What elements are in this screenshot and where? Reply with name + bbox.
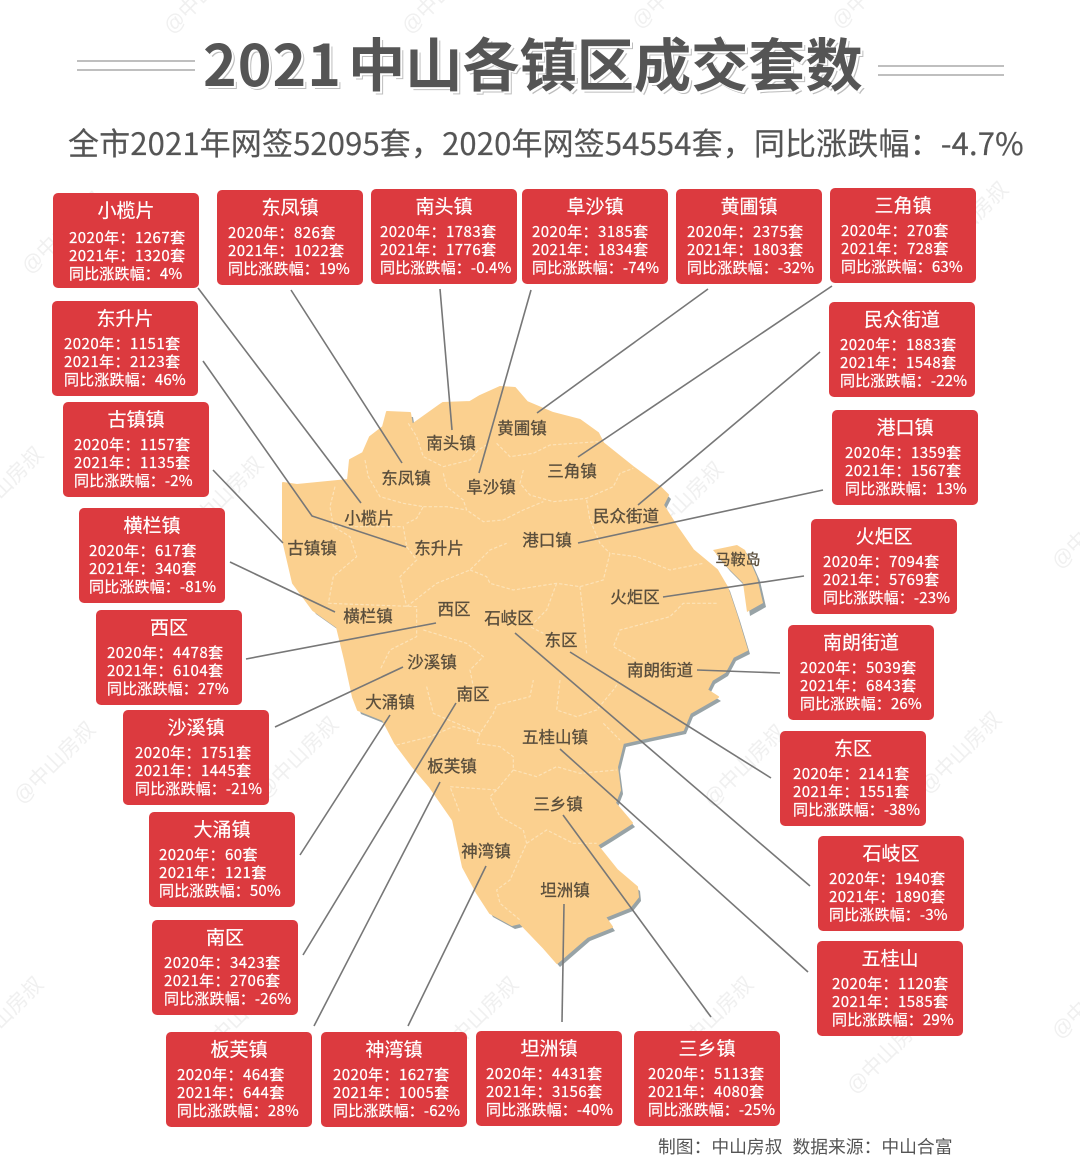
panel: 神湾镇: 同比涨跌幅：-62% [333,1100,460,1121]
panel: 东区 [780,731,926,826]
panel: 石岐区 [818,836,964,931]
panel: 古镇镇 [63,402,209,497]
text: @中山房叔 [177,453,268,544]
panel: 板芙镇: 2021年：644套 [177,1082,285,1103]
panel: 板芙镇: 2020年：464套 [177,1064,285,1085]
panel: 南朗街道: 2021年：6843套 [800,675,917,696]
subtitle: 全市2021年网签52095套，2020年网签54554套，同比涨跌幅：-4.7% [68,119,1024,164]
map place labels: 东升片 [414,535,464,559]
panel: 大涌镇: 大涌镇 [193,815,250,842]
panel: 板芙镇 [166,1032,312,1127]
map place labels: 阜沙镇 [466,474,516,498]
panel: 西区: 西区 [150,613,188,640]
panel: 沙溪镇: 沙溪镇 [167,713,224,740]
panel: 东升片: 2021年：2123套 [64,351,181,372]
map place labels: 西区 [438,596,470,620]
map place labels: 三乡镇 [533,791,583,815]
panel: 三角镇: 2021年：728套 [841,238,949,259]
panel: 民众街道: 同比涨跌幅：-22% [840,370,967,391]
panel: 南头镇: 2020年：1783套 [380,221,497,242]
panel: 横栏镇: 2020年：617套 [89,540,197,561]
panel: 沙溪镇: 2020年：1751套 [135,742,252,763]
panel: 民众街道: 民众街道 [864,305,940,332]
panel: 五桂山: 2020年：1120套 [832,973,949,994]
panel: 坦洲镇: 2020年：4431套 [486,1063,603,1084]
panel: 三乡镇: 2020年：5113套 [648,1063,765,1084]
map place labels: 神湾镇 [461,838,511,862]
panel: 港口镇 [832,410,978,505]
panel: 南区: 南区 [206,923,244,950]
map place labels: 石岐区 [484,605,534,629]
panel: 东升片: 2020年：1151套 [64,333,181,354]
panel: 古镇镇: 同比涨跌幅：-2% [74,470,193,491]
panel: 石岐区: 2020年：1940套 [829,868,946,889]
panel: 神湾镇: 2021年：1005套 [333,1082,450,1103]
panel: 火炬区: 2021年：5769套 [823,569,940,590]
map place labels [287,415,761,901]
text: @中山房叔 [637,458,728,549]
map place labels: 小榄片 [344,505,394,529]
panel: 大涌镇: 同比涨跌幅：50% [159,880,281,901]
panel: 民众街道 [829,302,975,397]
panel: 小榄片: 2021年：1320套 [69,245,186,266]
panel: 五桂山: 2021年：1585套 [832,991,949,1012]
panel: 黄圃镇: 黄圃镇 [720,192,778,219]
text: @中山房叔 [192,973,283,1064]
panel: 三角镇: 三角镇 [874,191,932,218]
panel: 小榄片 [53,193,199,288]
map place labels: 民众街道 [593,503,659,527]
map place labels: 三角镇 [547,458,597,482]
text: @中山房叔 [922,178,1013,269]
panel: 阜沙镇: 阜沙镇 [566,192,624,219]
panel: 黄圃镇: 2020年：2375套 [687,221,804,242]
panel: 南朗街道: 2020年：5039套 [800,657,917,678]
panel: 大涌镇: 2021年：121套 [159,862,267,883]
panel: 西区 [96,610,242,705]
panel: 古镇镇: 2020年：1157套 [74,434,191,455]
panel: 三角镇 [830,188,976,283]
panel: 横栏镇: 横栏镇 [123,511,180,538]
panel: 东区: 2020年：2141套 [793,763,910,784]
map place labels: 坦洲镇 [540,877,590,901]
title: 2021中山各镇区成交套数 [203,21,863,103]
text: @中山房叔 [432,973,523,1064]
panel: 板芙镇: 同比涨跌幅：28% [177,1100,299,1121]
map place labels: 大涌镇 [365,689,415,713]
panel: 黄圃镇 [676,189,822,284]
text: @中山房叔 [252,713,343,804]
map place labels: 东区 [544,627,578,651]
panel: 古镇镇: 2021年：1135套 [74,452,191,473]
panel: 南朗街道: 南朗街道 [823,628,899,655]
map place labels: 马鞍岛 [715,548,761,570]
text: @中山房叔 [9,718,100,809]
panel: 神湾镇 [321,1032,467,1127]
panel: 港口镇: 2020年：1359套 [845,442,962,463]
text: @中山房叔 [699,721,790,812]
panel: 三乡镇 [634,1031,780,1126]
panel: 火炬区: 2020年：7094套 [823,551,940,572]
panel: 沙溪镇: 2021年：1445套 [135,760,252,781]
map place labels: 东凤镇 [381,465,431,489]
text: @中山房叔 [915,708,1006,799]
panel: 古镇镇: 古镇镇 [107,405,164,432]
source credit: 制图：中山房叔 数据来源：中山合富 [658,1133,952,1159]
panel: 南头镇: 南头镇 [415,192,472,219]
text: @中山房叔 [842,1008,933,1099]
map place labels: 五桂山镇 [522,724,588,748]
panel: 港口镇: 港口镇 [876,413,934,440]
panel: 横栏镇 [79,508,225,603]
panel: 民众街道: 2020年：1883套 [840,334,957,355]
panel: 坦洲镇: 2021年：3156套 [486,1081,603,1102]
panel: 坦洲镇: 同比涨跌幅：-40% [486,1099,613,1120]
panel: 南头镇: 2021年：1776套 [380,239,497,260]
panel: 东凤镇: 东凤镇 [261,193,318,220]
panel: 南区: 同比涨跌幅：-26% [164,988,291,1009]
panel: 东区: 同比涨跌幅：-38% [793,799,920,820]
panel: 南朗街道 [788,625,934,720]
panel: 板芙镇: 板芙镇 [210,1035,268,1062]
panel: 西区: 同比涨跌幅：27% [107,678,229,699]
panel: 港口镇: 2021年：1567套 [845,460,962,481]
panel: 小榄片: 同比涨跌幅：4% [69,263,182,284]
panel: 南头镇: 同比涨跌幅：-0.4% [380,257,512,278]
panel: 沙溪镇 [123,710,269,805]
map of Zhongshan [283,387,766,967]
panel: 黄圃镇: 2021年：1803套 [687,239,804,260]
panel: 东凤镇: 2021年：1022套 [228,240,345,261]
panel: 火炬区: 同比涨跌幅：-23% [823,587,950,608]
panel: 大涌镇 [149,812,295,907]
panel: 三角镇: 同比涨跌幅：63% [841,256,963,277]
map place labels: 南朗街道 [627,657,693,681]
map place labels: 南区 [456,681,490,705]
panel: 三乡镇: 2021年：4080套 [648,1081,765,1102]
panel: 东区: 东区 [834,734,872,761]
map place labels: 横栏镇 [343,603,393,627]
panel: 三乡镇: 三乡镇 [678,1034,736,1061]
panel: 港口镇: 同比涨跌幅：13% [845,478,967,499]
map place labels: 南头镇 [426,430,476,454]
panel: 神湾镇: 神湾镇 [365,1035,422,1062]
map place labels: 火炬区 [610,584,660,608]
map place labels: 港口镇 [522,527,572,551]
panel: 黄圃镇: 同比涨跌幅：-32% [687,257,814,278]
panel: 东升片: 东升片 [96,304,154,331]
panel: 西区: 2020年：4478套 [107,642,224,663]
panel: 神湾镇: 2020年：1627套 [333,1064,450,1085]
panel: 坦洲镇 [476,1031,622,1126]
panel: 南区: 2020年：3423套 [164,952,281,973]
text: @中山房叔 [17,188,108,279]
panel: 沙溪镇: 同比涨跌幅：-21% [135,778,262,799]
map place labels: 黄圃镇 [497,415,547,439]
panel: 横栏镇: 2021年：340套 [89,558,197,579]
panel: 小榄片: 小榄片 [97,196,154,223]
panel: 横栏镇: 同比涨跌幅：-81% [89,576,216,597]
panel: 东凤镇: 同比涨跌幅：19% [228,258,350,279]
panel: 阜沙镇: 同比涨跌幅：-74% [532,257,659,278]
panel: 东区: 2021年：1551套 [793,781,910,802]
map place labels: 板芙镇 [427,753,477,777]
panel: 东凤镇: 2020年：826套 [228,222,336,243]
panel: 东凤镇 [217,190,363,285]
panel: 南区 [152,920,298,1015]
panel: 南区: 2021年：2706套 [164,970,281,991]
panel: 南头镇 [371,189,517,284]
panel: 火炬区: 火炬区 [855,522,912,549]
panel: 阜沙镇 [522,189,668,284]
panel: 阜沙镇: 2021年：1834套 [532,239,649,260]
panel: 石岐区: 2021年：1890套 [829,886,946,907]
panel: 五桂山: 五桂山 [861,944,918,971]
panel: 东升片 [52,301,198,396]
panel: 大涌镇: 2020年：60套 [159,844,258,865]
panel: 石岐区: 同比涨跌幅：-3% [829,904,948,925]
leader lines [198,286,832,1026]
map place labels: 古镇镇 [287,535,337,559]
panel: 火炬区 [811,519,957,614]
panel: 西区: 2021年：6104套 [107,660,224,681]
panel: 坦洲镇: 坦洲镇 [520,1034,578,1061]
map place labels: 沙溪镇 [407,649,457,673]
panel: 五桂山 [817,941,963,1036]
text: @中山房叔 [667,973,758,1064]
panel: 南朗街道: 同比涨跌幅：26% [800,693,922,714]
panel: 五桂山: 同比涨跌幅：29% [832,1009,954,1030]
panel: 三角镇: 2020年：270套 [841,220,949,241]
panel: 阜沙镇: 2020年：3185套 [532,221,649,242]
panel: 民众街道: 2021年：1548套 [840,352,957,373]
panel: 东升片: 同比涨跌幅：46% [64,369,186,390]
panel: 小榄片: 2020年：1267套 [69,227,186,248]
panel: 三乡镇: 同比涨跌幅：-25% [648,1099,775,1120]
panel: 石岐区: 石岐区 [862,839,920,866]
